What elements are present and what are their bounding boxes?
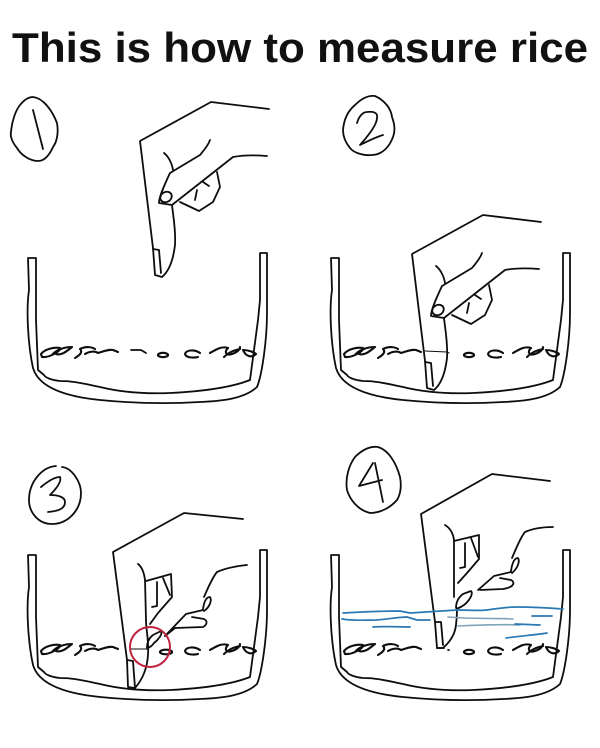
pot with rice [28, 253, 267, 403]
icon: number 2 [343, 96, 394, 155]
panel: step 3 [28, 466, 267, 700]
rice grains loose [425, 351, 474, 357]
icon: number 3 [29, 466, 81, 524]
water lines [342, 607, 563, 638]
rice grains loose [437, 648, 474, 654]
panel: step 2 [331, 96, 570, 403]
hand in water [421, 474, 553, 648]
icon: number 4 [346, 447, 401, 513]
hand pointing above the rice [140, 102, 269, 277]
callout: red circle on thumb mark [130, 627, 170, 667]
rice grains loose [131, 649, 172, 654]
hand touching the pot bottom [412, 215, 541, 390]
panel: step 1 [11, 97, 269, 403]
panel: step 4 [331, 447, 570, 700]
hand with thumb marking the water level [113, 513, 247, 688]
pot with rice [331, 550, 570, 700]
rice grains loose [131, 350, 168, 357]
pot with rice [28, 550, 267, 700]
title: This is how to measure rice [12, 24, 588, 71]
icon: number 1 [11, 97, 58, 161]
pot with rice [331, 253, 570, 403]
